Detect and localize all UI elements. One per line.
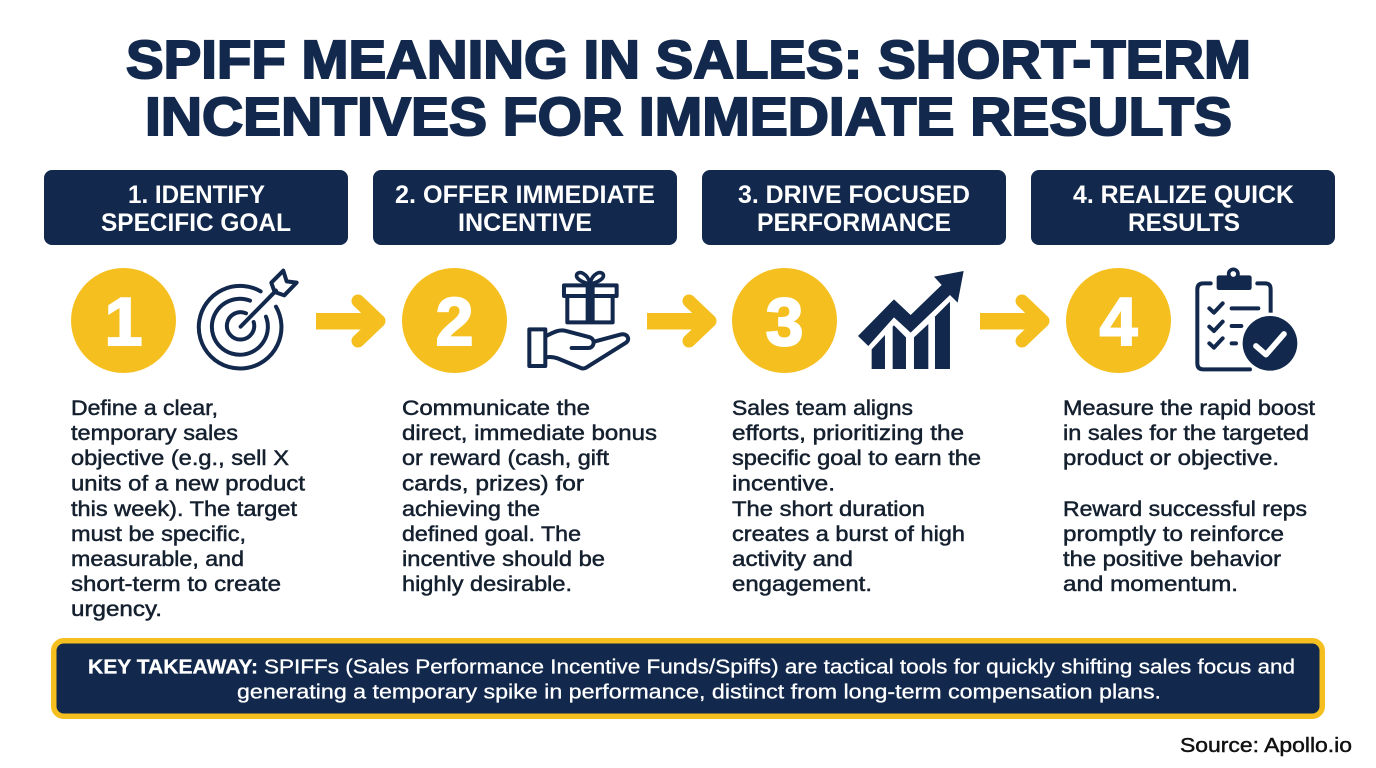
text block: step 1 description: Define a clear, [71, 397, 218, 420]
panel: step 4 heading [1031, 170, 1335, 245]
number badge 4 [1066, 268, 1171, 373]
callout: key takeaway: KEY TAKEAWAY: [88, 656, 258, 678]
callout: key takeaway: SPIFFs (Sales Performance Incentive Funds/Spiffs) are tactical tools for quickly shifting sales focus and [264, 656, 1295, 678]
panel: step 3 heading: PERFORMANCE [757, 209, 951, 237]
text block: step 2 description: achieving the [402, 498, 540, 521]
text block: step 3 description: The short duration [732, 498, 925, 521]
icon: hand offering gift [529, 273, 628, 368]
text block: step 1 description: must be specific, [71, 523, 246, 546]
number badge 2: 2 [436, 284, 473, 360]
text block: step 1 description: urgency. [71, 598, 162, 621]
text block: step 2 description: highly desirable. [402, 573, 572, 596]
text block: step 4 description: and momentum. [1063, 573, 1238, 596]
text block: step 1 description [71, 397, 305, 621]
text block: step 2 description: defined goal. The [402, 523, 581, 546]
panel: step 1 heading: SPECIFIC GOAL [101, 209, 291, 237]
text block: step 4 description: promptly to reinforce [1063, 523, 1284, 546]
panel: step 3 heading: 3. DRIVE FOCUSED [738, 181, 970, 209]
text block: step 3 description: incentive. [732, 472, 835, 496]
text block: step 1 description: short-term to create [71, 573, 281, 596]
panel: step 1 heading: 1. IDENTIFY [128, 181, 265, 209]
text block: step 2 description [402, 397, 657, 596]
text block: step 2 description: incentive should be [402, 548, 605, 571]
number badge 3: 3 [766, 284, 803, 360]
arrow 3 to 4 [980, 301, 1043, 341]
text block: step 2 description: or reward (cash, gift [402, 447, 609, 470]
panel: step 2 heading: 2. OFFER IMMEDIATE [395, 181, 655, 209]
text block: step 4 description: in sales for the targeted [1063, 422, 1309, 445]
text block: step 4 description: Reward successful reps [1063, 498, 1307, 521]
title: SPIFF MEANING IN SALES: SHORT-TERM [126, 30, 1251, 90]
text block: step 1 description: objective (e.g., sell X [71, 447, 289, 470]
text block: step 3 description: efforts, prioritizing the [732, 422, 964, 445]
text block: step 2 description: direct, immediate bonus [402, 422, 657, 445]
text block: step 1 description: temporary sales [71, 422, 238, 445]
number badge 2 [402, 268, 507, 373]
icon: rising bar chart with arrow [858, 271, 964, 369]
arrow 1 to 2 [316, 301, 379, 341]
text block: step 3 description: activity and [732, 548, 853, 571]
text block: step 1 description: units of a new product [71, 472, 305, 496]
title: INCENTIVES FOR IMMEDIATE RESULTS [145, 87, 1232, 147]
number badge 1 [71, 268, 176, 373]
callout: key takeaway: generating a temporary spike in performance, distinct from long-term compensation plans. [237, 682, 1161, 704]
text block: step 2 description: Communicate the [402, 397, 590, 420]
source note: Source: Apollo.io [1180, 735, 1352, 757]
icon: clipboard checklist with check badge [1197, 269, 1301, 374]
panel: step 4 heading: 4. REALIZE QUICK [1073, 181, 1294, 209]
text block: step 1 description: this week). The target [71, 498, 297, 521]
text block: step 3 description: specific goal to earn the [732, 447, 981, 470]
icon: target with dart [199, 271, 297, 369]
text block: step 2 description: cards, prizes) for [402, 472, 584, 496]
text block: step 3 description: Sales team aligns [732, 397, 913, 420]
number badge 1: 1 [105, 284, 142, 360]
text block: step 4 description: product or objective. [1063, 447, 1279, 470]
panel: step 4 heading: RESULTS [1128, 209, 1240, 237]
arrow 2 to 3 [647, 301, 710, 341]
text block: step 4 description [1063, 397, 1315, 596]
text block: step 3 description [732, 397, 981, 596]
panel: step 2 heading: INCENTIVE [458, 209, 592, 237]
panel: step 2 heading [373, 170, 677, 245]
panel: step 3 heading [702, 170, 1006, 245]
panel: step 1 heading [44, 170, 348, 245]
text block: step 4 description: Measure the rapid boost [1063, 397, 1315, 420]
text block: step 3 description: engagement. [732, 573, 872, 596]
number badge 3 [732, 268, 837, 373]
callout: key takeaway [54, 641, 1322, 716]
text block: step 1 description: measurable, and [71, 548, 244, 571]
title [126, 30, 1251, 147]
number badge 4: 4 [1100, 284, 1138, 360]
text block: step 3 description: creates a burst of high [732, 523, 965, 546]
text block: step 4 description: the positive behavior [1063, 548, 1281, 571]
